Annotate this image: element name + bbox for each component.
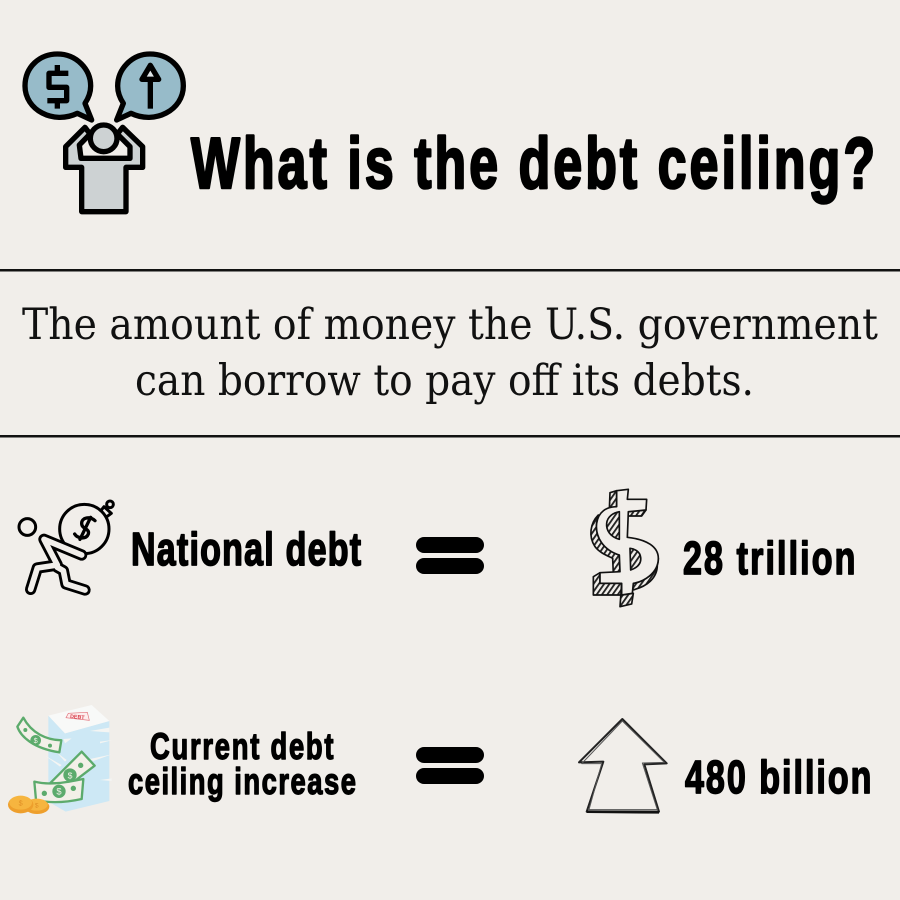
definition text [22, 300, 878, 406]
dollar extrusion [591, 491, 658, 607]
icon: hand-drawn dollar sign [591, 489, 658, 607]
top divider [0, 269, 900, 272]
label: national debt: National debt [131, 523, 361, 575]
dollar face [596, 489, 658, 595]
icon: dollar speech bubble [25, 54, 92, 120]
flat bill: $ [56, 787, 62, 797]
icon: up arrow speech bubble [117, 54, 183, 120]
icon: person carrying debt ball [19, 501, 113, 590]
head [19, 519, 36, 535]
value: 28 trillion: 28 trillion [683, 532, 855, 584]
coins: $ [19, 798, 23, 807]
equals sign: debt ceiling increase [416, 747, 484, 784]
debt label: DEBT [70, 714, 85, 721]
falling bill: $ [34, 736, 38, 745]
upper hole [607, 512, 619, 539]
icon: stressed person with speech bubbles [25, 54, 183, 212]
definition line 2: can borrow to pay off its debts. [135, 356, 754, 406]
icon: hand-drawn up arrow [579, 719, 667, 812]
leaning bill: $ [68, 770, 73, 780]
label: current debt ceiling increase [128, 726, 356, 802]
bottom divider [0, 435, 900, 438]
coins [8, 796, 49, 814]
debt ball [60, 501, 113, 554]
coins: $ [35, 802, 39, 809]
label line 2: ceiling increase [128, 761, 356, 802]
icon: money and debt paper stack [8, 705, 113, 814]
label line 1: Current debt [150, 726, 334, 767]
value: 480 billion: 480 billion [685, 751, 871, 803]
equals sign: national debt [416, 537, 484, 574]
title: What is the debt ceiling? [191, 124, 875, 204]
lower hole [630, 548, 641, 570]
icon: person holding head [66, 125, 143, 212]
body [31, 539, 85, 590]
